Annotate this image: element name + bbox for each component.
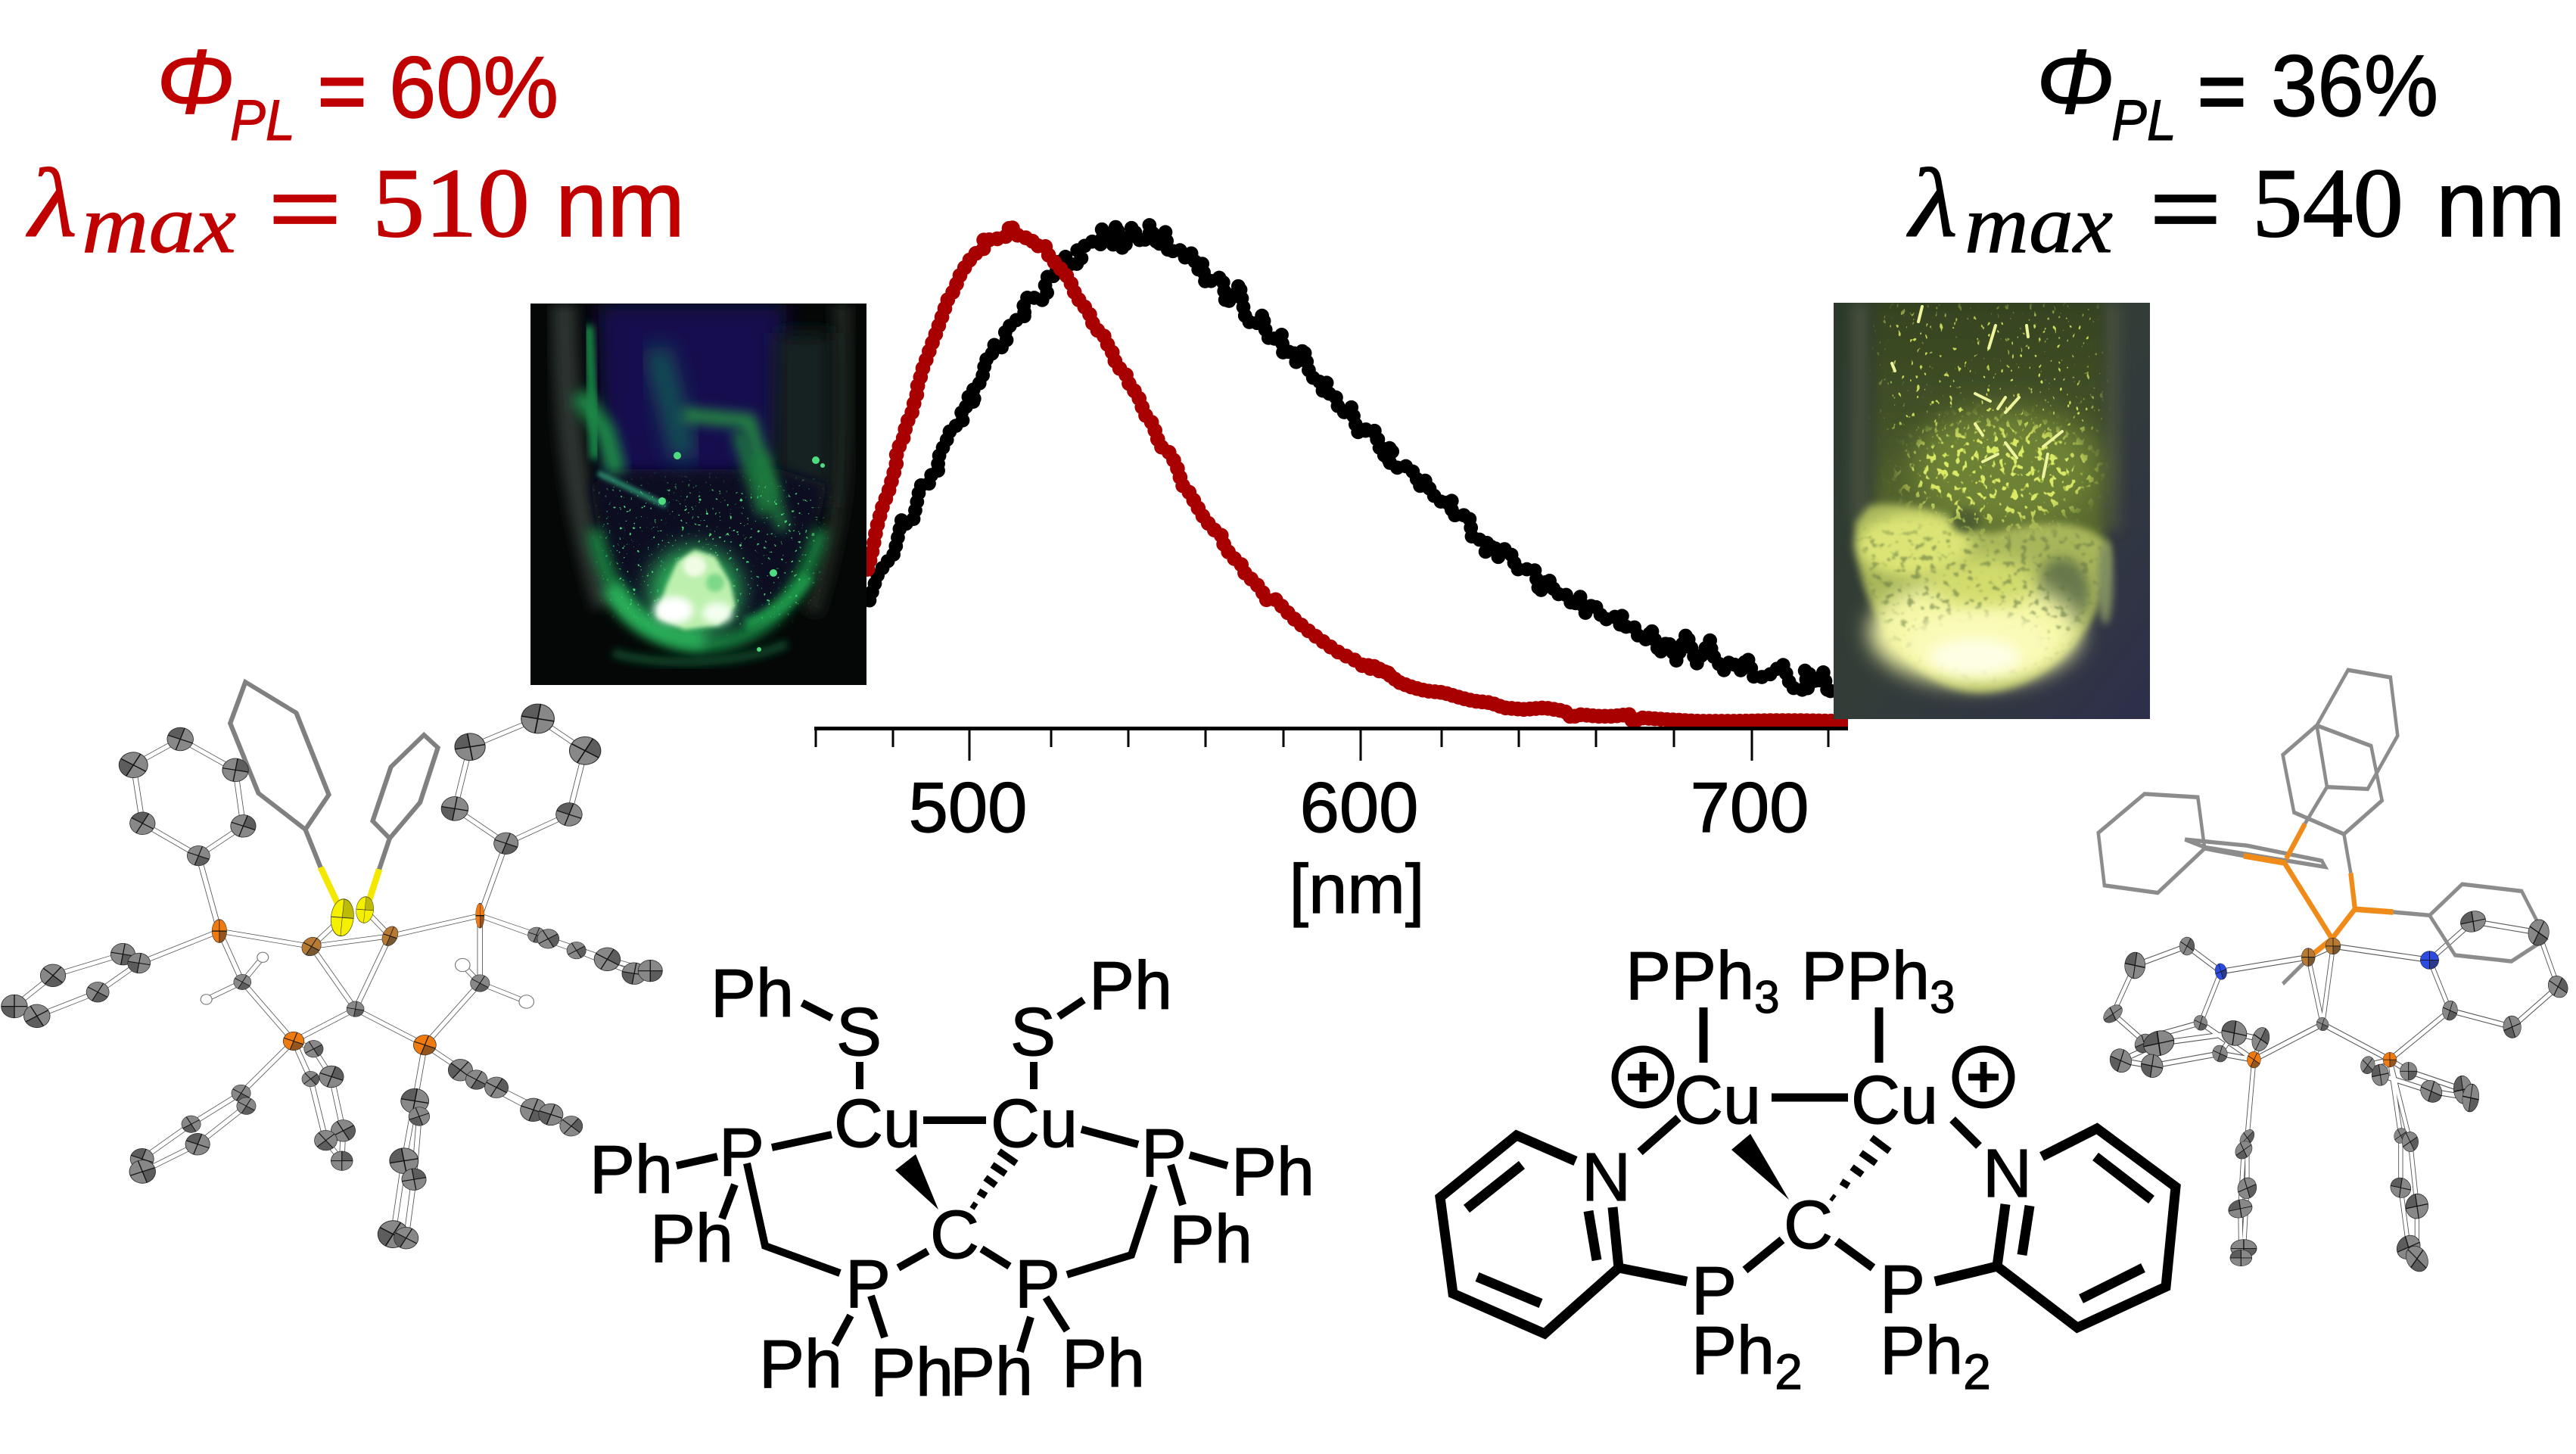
label: black emission maximum	[1906, 148, 2565, 270]
label: black emission maximum: max	[1965, 178, 2113, 270]
label: black emission maximum: nm	[2436, 153, 2565, 257]
atom labels: 2	[1963, 1343, 1991, 1400]
photo: yellow emitting crystals in tube	[1834, 300, 2150, 719]
atom labels	[1582, 939, 2032, 1400]
atom labels: C	[1784, 1188, 1833, 1263]
label: black emission maximum: λ	[1906, 149, 1958, 258]
wedge bond	[1731, 1134, 1789, 1200]
wedge bond	[895, 1154, 938, 1210]
axis tick labels	[909, 767, 1809, 847]
label: black emission maximum: 540	[2252, 148, 2403, 258]
atom labels: Ph	[1691, 1313, 1775, 1389]
pyridine rings and bonds	[1440, 1007, 2176, 1334]
atom labels: Ph	[759, 1327, 842, 1403]
atom labels: S	[1010, 995, 1056, 1070]
label: red quantum yield	[156, 30, 558, 153]
atom labels: C	[930, 1197, 979, 1273]
atom labels: P	[1880, 1252, 1925, 1328]
chemical structure: left thiolate complex	[590, 948, 1314, 1411]
positive charge left	[1615, 1049, 1671, 1105]
label: red emission maximum: λ	[25, 149, 77, 258]
photo: green emitting crystals in tube	[530, 304, 866, 685]
atom labels: S	[836, 995, 882, 1070]
atom labels: N	[1983, 1136, 2032, 1212]
label: red emission maximum	[25, 148, 685, 270]
label: red quantum yield: =	[318, 45, 366, 138]
label: black quantum yield: Φ	[2036, 30, 2114, 133]
atom labels: Cu	[991, 1086, 1078, 1162]
atom labels: 3	[1754, 972, 1780, 1023]
positive charge right	[1955, 1049, 2011, 1105]
axis tick labels: 700	[1691, 767, 1809, 847]
chemical structure: right pyridyl cationic complex	[1440, 939, 2176, 1400]
atom labels: 2	[1775, 1343, 1803, 1400]
data series: red emission curve (510 nm)	[868, 224, 1849, 721]
crystal structure: left thiolate dicopper complex	[2, 682, 662, 1253]
atom labels: P	[1691, 1253, 1737, 1329]
label: red emission maximum: nm	[555, 153, 685, 257]
atom labels: Ph	[1089, 948, 1172, 1024]
atom labels: P	[1015, 1247, 1060, 1322]
label: red quantum yield: PL	[230, 89, 295, 153]
atom labels: Ph	[870, 1335, 954, 1411]
atom labels	[590, 948, 1314, 1411]
atom labels: Cu	[834, 1086, 921, 1162]
axis title: [nm]	[1290, 851, 1424, 928]
atom labels: Ph	[711, 956, 794, 1032]
atom labels: Ph	[1169, 1202, 1252, 1278]
x axis	[814, 727, 1848, 928]
label: red emission maximum: 510	[372, 148, 530, 258]
atom labels: PPh	[1626, 939, 1754, 1014]
data series: black emission curve (540 nm)	[870, 225, 1835, 694]
atom labels: Ph	[590, 1132, 673, 1208]
atom labels: PPh	[1801, 939, 1930, 1014]
atom labels: Ph	[1231, 1135, 1314, 1210]
crystal structure: right pyridyl dicopper complex	[2098, 670, 2571, 1277]
atom labels: Ph	[650, 1201, 733, 1277]
atom labels: 3	[1930, 972, 1955, 1023]
atom labels: Ph	[1880, 1313, 1963, 1389]
label: black quantum yield: PL	[2111, 89, 2176, 153]
bonds	[677, 1000, 1227, 1352]
atom labels: Cu	[1851, 1063, 1938, 1138]
axis tick labels: 500	[909, 767, 1027, 847]
label: black emission maximum: =	[2150, 160, 2221, 257]
atom labels: Ph	[1062, 1326, 1145, 1402]
atom labels: P	[845, 1247, 891, 1322]
atom labels: Ph	[950, 1334, 1033, 1410]
label: black quantum yield: =	[2198, 45, 2246, 138]
atom labels: Cu	[1674, 1063, 1761, 1138]
emission spectrum chart	[814, 224, 1849, 928]
atom labels: P	[719, 1115, 764, 1191]
label: red emission maximum: =	[269, 160, 341, 257]
atom labels: P	[1141, 1116, 1187, 1191]
label: black quantum yield	[2036, 30, 2438, 153]
atom labels: N	[1582, 1140, 1631, 1216]
label: red quantum yield: 60%	[389, 39, 558, 136]
label: red quantum yield: Φ	[156, 30, 235, 133]
label: red emission maximum: max	[82, 178, 236, 270]
axis tick labels: 600	[1300, 767, 1418, 847]
label: black quantum yield: 36%	[2271, 38, 2438, 135]
